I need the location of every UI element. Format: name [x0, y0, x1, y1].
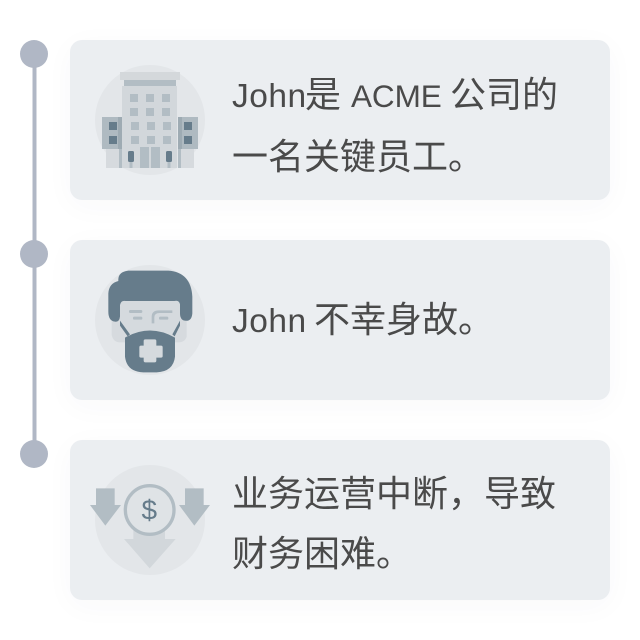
dollar sign: $	[142, 494, 158, 525]
text: John is an ACME employee: 是 公司的	[305, 74, 558, 115]
text: John passes away	[232, 299, 494, 340]
text: business interruption: 财务困难。	[232, 533, 412, 574]
text: John is an ACME employee	[232, 74, 558, 177]
text: business interruption: 业务运营中断，导致	[232, 473, 556, 514]
text: John passes away: 不幸身故。	[314, 299, 494, 340]
text: John is an ACME employee: John	[232, 78, 307, 115]
text: John is an ACME employee: 一名关键员工。	[232, 136, 484, 177]
panel: death card	[70, 240, 610, 400]
panel: company employee card	[70, 40, 610, 200]
text: business interruption	[232, 473, 556, 574]
text: John passes away: John	[232, 303, 307, 340]
text: John is an ACME employee: ACME	[351, 78, 442, 114]
panel: business disruption card	[70, 440, 610, 600]
